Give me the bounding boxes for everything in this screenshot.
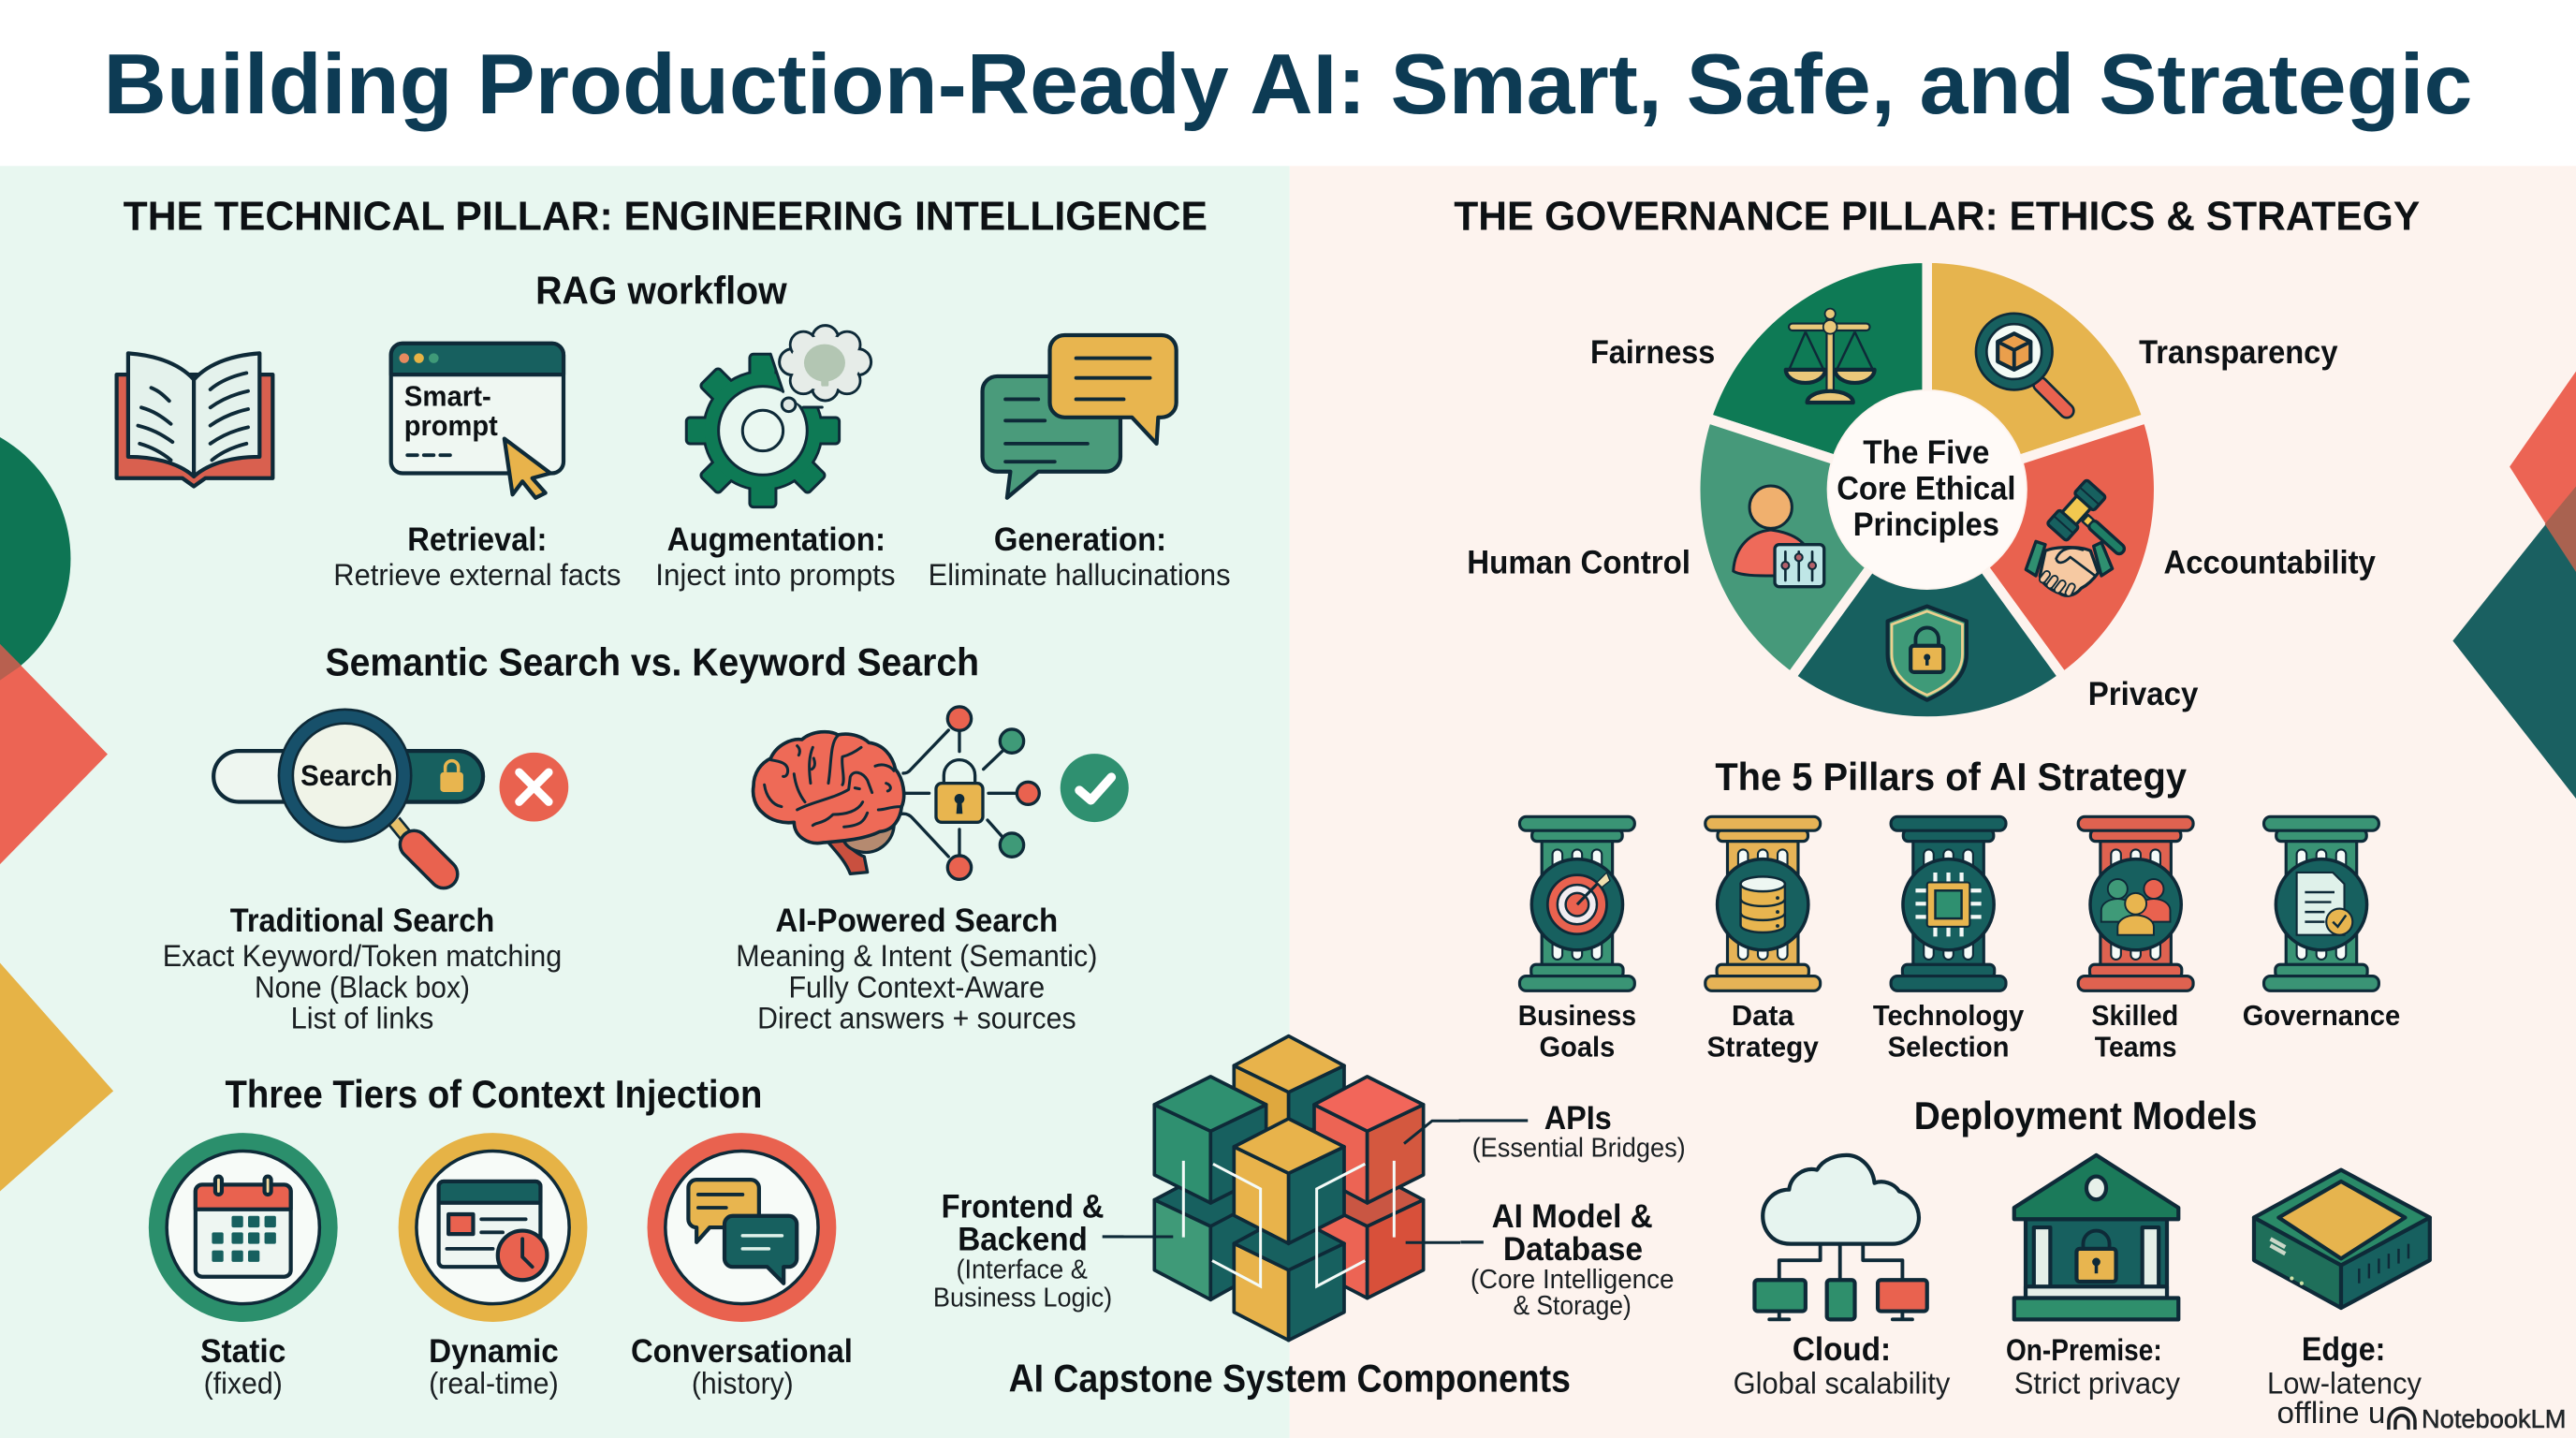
label: cloud: Global scalability	[1734, 1366, 1951, 1400]
icon: brain with network	[754, 707, 1039, 879]
panel: governance pillar background	[1290, 166, 2576, 1438]
label: accountability: Accountability	[2163, 545, 2376, 581]
icon: chat bubbles	[983, 335, 1177, 498]
watermark: NotebookLM	[2387, 1401, 2576, 1438]
text block: traditional search: List of links	[291, 1002, 433, 1035]
segment: privacy	[1791, 566, 2063, 722]
label: frontend and backend: Business Logic)	[933, 1283, 1112, 1313]
label: technology selection: Technology	[1873, 999, 2024, 1032]
wheel centre text: Principles	[1853, 506, 1999, 543]
label: AI model and database	[1471, 1198, 1674, 1321]
label: APIs: (Essential Bridges)	[1472, 1134, 1686, 1164]
icon: browser smart-prompt window: Smart-	[404, 380, 491, 413]
label: edge: Low-latency	[2267, 1366, 2422, 1400]
icon: scales	[1786, 309, 1875, 403]
label: retrieval: Retrieval:	[407, 521, 547, 558]
label: generation: Eliminate hallucinations	[929, 558, 1231, 592]
icon: search bar with magnifier	[213, 716, 483, 874]
label: skilled teams: Teams	[2095, 1031, 2177, 1064]
pillar: skilled teams	[2078, 816, 2193, 990]
icon: gear with thought cloud	[686, 326, 871, 507]
label: business goals	[1518, 999, 1636, 1064]
pillar: technology selection	[1891, 816, 2006, 990]
label: retrieval: Retrieve external facts	[333, 558, 621, 592]
label: cloud: Cloud:	[1793, 1331, 1891, 1368]
label: retrieval	[333, 521, 621, 592]
label: privacy: Privacy	[2088, 676, 2199, 712]
icon: cloud with devices	[1754, 1155, 1927, 1319]
label: dynamic	[429, 1333, 559, 1400]
icon: green check badge	[1061, 754, 1129, 822]
heading: governance pillar: THE GOVERNANCE PILLAR: ETHICS & STRATEGY	[1454, 194, 2420, 240]
label: dynamic: (real-time)	[429, 1366, 559, 1400]
icon: magnifier over cube	[1982, 318, 2067, 411]
wheel centre text	[1837, 434, 2016, 543]
label: business goals: Goals	[1540, 1031, 1615, 1064]
section: three tiers	[157, 1073, 853, 1400]
heading: capstone components: AI Capstone System Components	[1009, 1357, 1571, 1401]
text block: AI-powered search: Meaning & Intent (Semantic)	[736, 939, 1097, 973]
label: data strategy	[1707, 999, 1819, 1064]
heading: deployment models: Deployment Models	[1914, 1094, 2258, 1137]
heading: semantic search: Semantic Search vs. Keyword Search	[326, 640, 979, 683]
label: AI model and database: (Core Intelligence	[1471, 1265, 1674, 1295]
text block: AI-powered search: AI-Powered Search	[775, 902, 1058, 939]
label: APIs	[1472, 1100, 1686, 1164]
label: static: (fixed)	[204, 1366, 283, 1400]
text block: AI-powered search	[736, 902, 1097, 1035]
label: frontend and backend	[933, 1189, 1112, 1313]
label: generation	[929, 521, 1231, 592]
segment: human control	[1695, 418, 1871, 677]
heading: RAG workflow: RAG workflow	[535, 270, 788, 313]
heading: five pillars: The 5 Pillars of AI Strategy	[1715, 756, 2187, 799]
pillar: governance	[2264, 816, 2378, 990]
label: conversational: Conversational	[631, 1333, 853, 1370]
icon: edge device	[2254, 1170, 2430, 1308]
wheel centre text: Core Ethical	[1837, 471, 2016, 507]
label: AI model and database: Database	[1503, 1231, 1643, 1268]
segment: transparency	[1927, 258, 2147, 461]
icon: isometric cube stack	[1123, 1036, 1460, 1341]
chart: five core ethical principles wheel	[1467, 258, 2376, 722]
label: conversational	[631, 1333, 853, 1400]
section: semantic vs keyword search	[163, 640, 1129, 1035]
icon: shield lock	[1888, 607, 1967, 700]
heading: three tiers: Three Tiers of Context Injection	[225, 1073, 762, 1116]
header band	[0, 0, 2576, 166]
icon: static calendar	[157, 1142, 329, 1313]
text block: traditional search: Traditional Search	[230, 902, 494, 939]
centre hub	[1828, 391, 2026, 588]
icon: open book	[117, 353, 272, 487]
icon: dynamic window with clock	[407, 1142, 578, 1313]
label: governance: Governance	[2243, 999, 2400, 1032]
label: technology selection	[1873, 999, 2024, 1064]
label: on-premise: Strict privacy	[2014, 1366, 2181, 1400]
label: augmentation	[655, 521, 896, 592]
title: Building Production-Ready AI: Smart, Safe, and Strategic	[104, 37, 2472, 132]
segment: fairness	[1706, 258, 1927, 461]
label: APIs: APIs	[1544, 1100, 1612, 1137]
wheel centre text: The Five	[1863, 434, 1989, 471]
pillar: data strategy	[1705, 816, 1821, 990]
label: generation: Generation:	[994, 521, 1166, 558]
text block: traditional search	[163, 902, 562, 1035]
panel: technical pillar background	[0, 166, 1290, 1438]
label: transparency: Transparency	[2139, 334, 2338, 371]
label: data strategy: Data	[1732, 999, 1794, 1032]
heading: technical pillar: THE TECHNICAL PILLAR: ENGINEERING INTELLIGENCE	[124, 194, 1208, 240]
text block: AI-powered search: Direct answers + sources	[757, 1002, 1076, 1035]
label: augmentation: Augmentation:	[667, 521, 886, 558]
label: conversational: (history)	[692, 1366, 794, 1400]
label: human control: Human Control	[1467, 545, 1690, 581]
icon: search bar with magnifier: Search	[300, 758, 392, 792]
text block: traditional search: Exact Keyword/Token matching	[163, 939, 562, 973]
segment: accountability	[1983, 418, 2159, 677]
icon: person with controls	[1734, 486, 1824, 587]
label: edge: Edge:	[2302, 1331, 2385, 1368]
label: static: Static	[200, 1333, 285, 1370]
label: frontend and backend: Backend	[958, 1222, 1088, 1258]
leader lines	[1103, 1121, 1528, 1242]
section: AI capstone system components	[933, 1036, 1686, 1401]
label: on-premise	[2006, 1333, 2181, 1400]
label: AI model and database: AI Model &	[1492, 1198, 1653, 1235]
label: dynamic: Dynamic	[429, 1333, 559, 1370]
label: frontend and backend: Frontend &	[942, 1189, 1104, 1225]
label: augmentation: Inject into prompts	[655, 558, 896, 592]
section: RAG workflow	[117, 270, 1231, 592]
label: edge: offline u	[2277, 1396, 2385, 1430]
watermark: NotebookLM: NotebookLM	[2422, 1404, 2566, 1433]
label: on-premise: On-Premise:	[2006, 1333, 2162, 1367]
label: skilled teams	[2091, 999, 2178, 1064]
text block: traditional search: None (Black box)	[255, 970, 470, 1004]
icon: on-premise bank with lock	[2014, 1155, 2178, 1319]
icon: conversational bubbles	[656, 1142, 827, 1313]
label: static	[200, 1333, 285, 1400]
text block: AI-powered search: Fully Context-Aware	[788, 970, 1045, 1004]
label: AI model and database: & Storage)	[1513, 1291, 1632, 1321]
icon: browser smart-prompt window: prompt	[404, 409, 498, 442]
pillar: business goals	[1519, 816, 1634, 990]
label: cloud	[1734, 1331, 1951, 1400]
left edge decorative shapes	[0, 419, 113, 1191]
label: frontend and backend: (Interface &	[956, 1255, 1088, 1284]
label: technology selection: Selection	[1888, 1031, 2009, 1064]
label: skilled teams: Skilled	[2091, 999, 2178, 1032]
right edge decorative shapes	[2452, 372, 2576, 799]
icon: gavel and handshake	[2026, 479, 2143, 595]
label: edge	[2267, 1331, 2422, 1430]
label: data strategy: Strategy	[1707, 1031, 1819, 1064]
label: business goals: Business	[1518, 999, 1636, 1032]
label: fairness: Fairness	[1590, 334, 1715, 371]
section: deployment models	[1734, 1094, 2430, 1430]
icon: browser smart-prompt window	[391, 344, 564, 498]
section: five pillars of AI strategy	[1518, 756, 2400, 1064]
icon: red cross badge	[500, 753, 568, 822]
